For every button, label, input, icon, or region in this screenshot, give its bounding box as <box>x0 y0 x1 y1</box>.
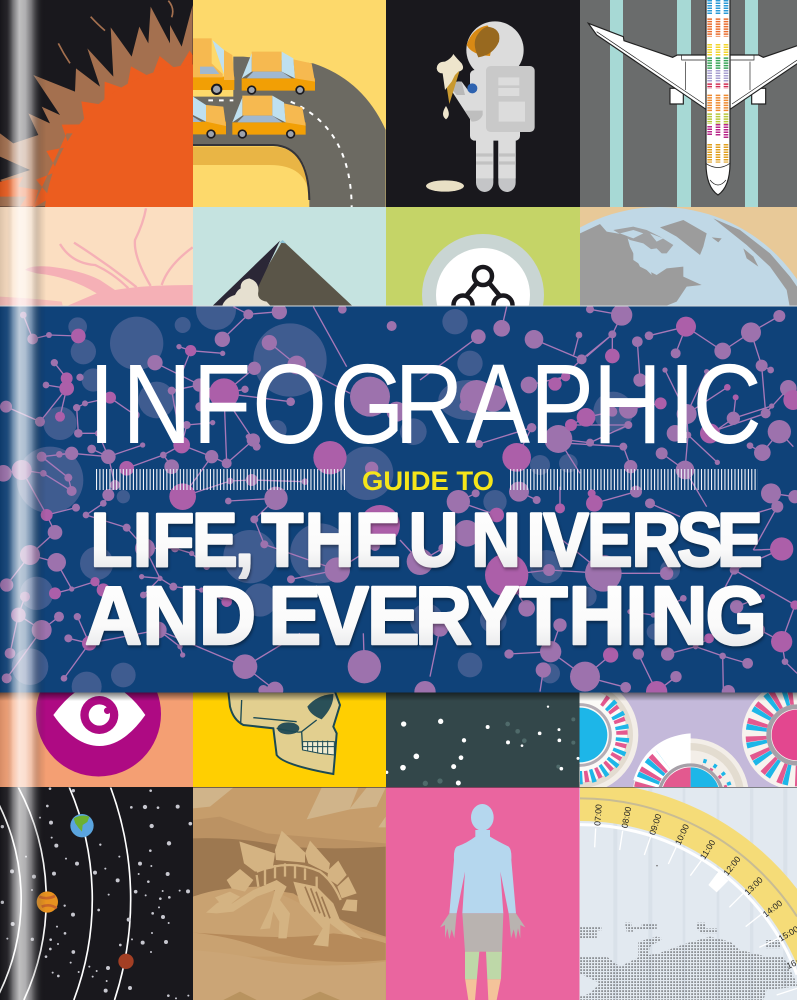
title: INFOGRAPHIC: INFOGRAPHIC <box>88 342 762 468</box>
panel: globe <box>580 207 797 306</box>
icon: Venus <box>37 891 58 913</box>
panel: pyramid and sphinx <box>193 207 386 308</box>
panel: pink sun silhouette <box>0 207 193 308</box>
icon: taxi 2 <box>242 52 315 95</box>
title: LIFE, THE UNIVERSE: LIFE, THE UNIVERSE <box>91 499 763 583</box>
panel: astronaut dropping ice cream <box>386 0 580 207</box>
chart: left radial <box>580 692 638 787</box>
icon: molecule <box>454 267 512 314</box>
clock hour labels <box>592 804 797 971</box>
icon: taxi 4 <box>232 96 306 139</box>
clock hour labels: 13:00 <box>742 875 765 897</box>
panel: stars <box>385 692 580 787</box>
panel: molecule in a circle <box>386 207 580 306</box>
panel: stegosaurus fossil <box>193 787 386 1000</box>
decorative tick ruler left <box>96 469 345 490</box>
panel: sun with solar flares <box>0 0 193 207</box>
book spine gloss highlight <box>0 0 46 1000</box>
title: AND EVERYTHING: AND EVERYTHING <box>85 570 767 662</box>
clock hour labels: 11:00 <box>698 838 717 861</box>
clock hour labels: 09:00 <box>647 812 663 836</box>
panel: taxis on a road <box>193 0 386 208</box>
clock hour labels: 08:00 <box>619 806 633 829</box>
icon: dinosaur skeleton <box>206 831 363 947</box>
clock hour labels: 12:00 <box>721 854 743 877</box>
molecule network <box>0 290 797 702</box>
chart: right radial <box>742 692 797 787</box>
icon: Earth <box>70 814 94 837</box>
clock hour labels: 07:00 <box>592 804 604 826</box>
panel: aeroplane seating plan <box>579 0 797 207</box>
clock hour labels: 10:00 <box>673 822 691 846</box>
icon: taxi 1 <box>193 38 234 95</box>
panel: clock and dotted world map <box>579 782 797 1000</box>
chart: centre radial <box>633 733 748 787</box>
subtitle: GUIDE TO: GUIDE TO <box>362 466 494 496</box>
panel: skull <box>193 692 386 787</box>
panel: human body <box>386 788 580 1000</box>
panel: radial charts <box>580 692 797 787</box>
banner shadow on lower tiles <box>0 692 797 701</box>
decorative tick ruler right <box>510 469 758 490</box>
clock hour labels: 14:00 <box>761 898 784 919</box>
panel: title banner <box>0 290 797 702</box>
panel: solar system <box>0 787 193 1000</box>
icon: taxi 3 <box>193 97 226 139</box>
icon: Mars <box>118 954 134 969</box>
panel: eye <box>0 692 193 787</box>
